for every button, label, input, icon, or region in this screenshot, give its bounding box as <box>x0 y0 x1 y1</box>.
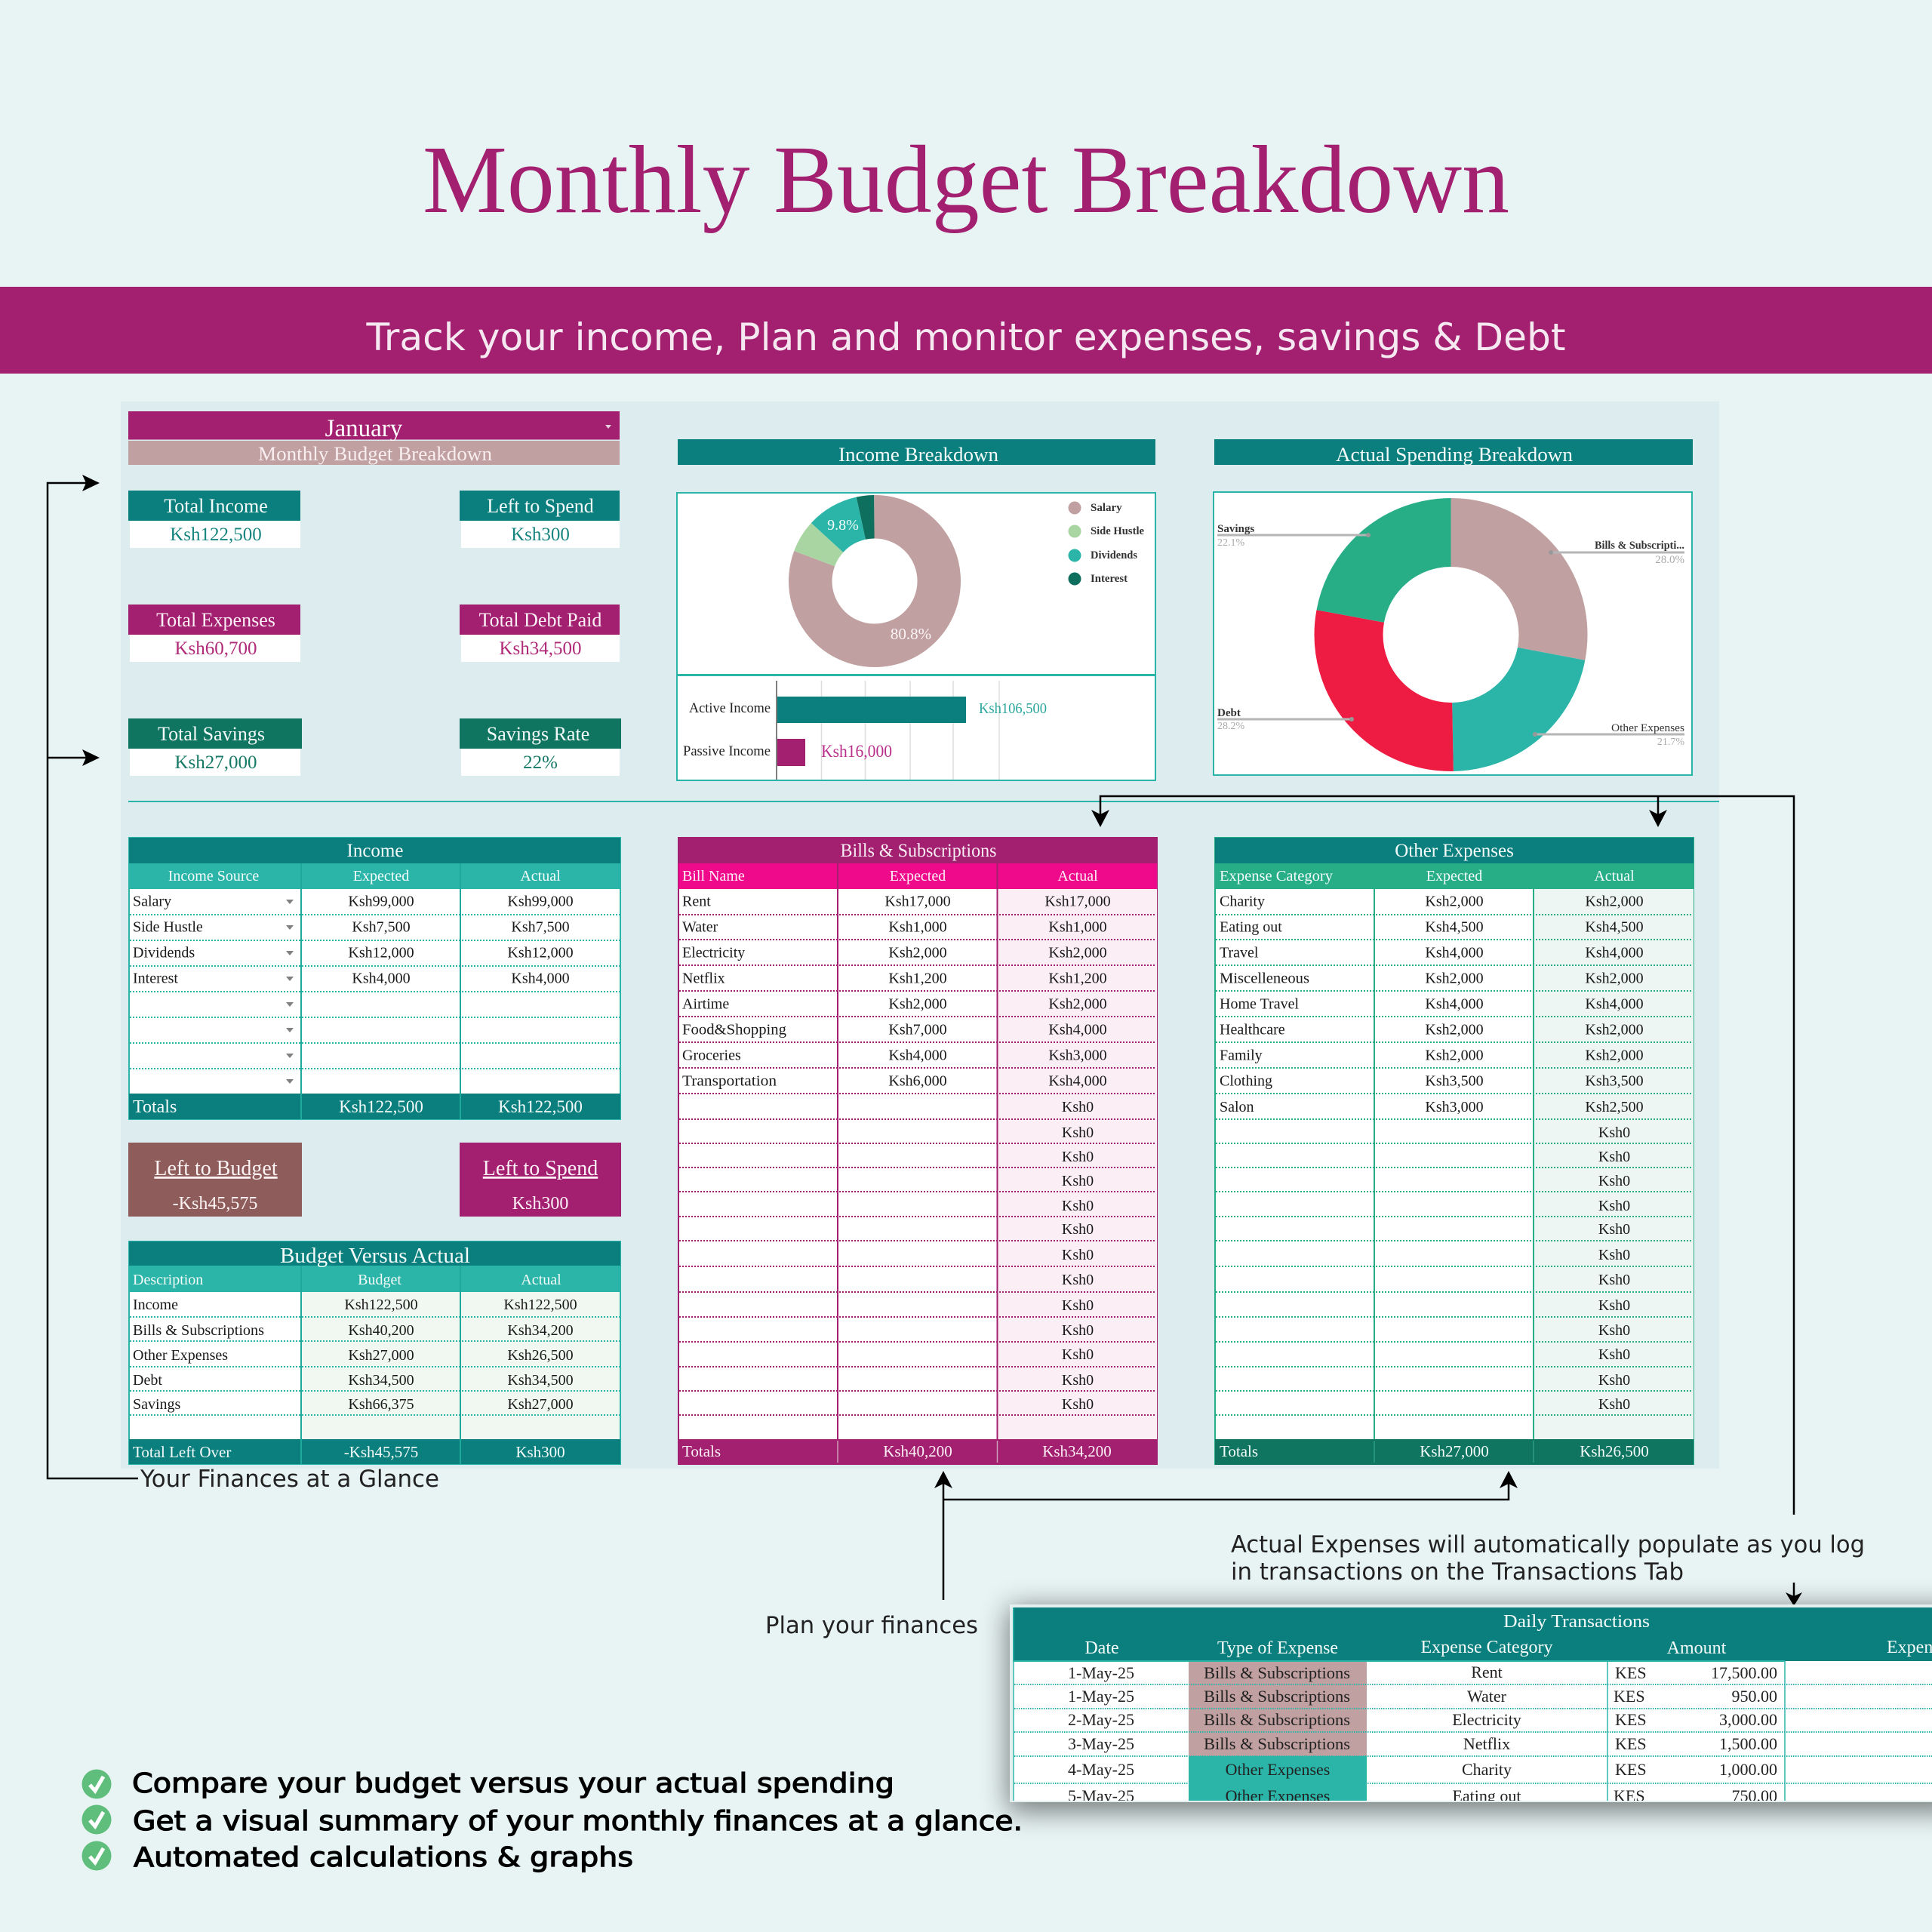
subtitle band: Track your income, Plan and monitor expenses, savings & Debt <box>365 315 1566 359</box>
table: bills and subscriptions: Ksh0 <box>1062 1396 1094 1413</box>
table: income: Ksh7,500 <box>352 919 411 936</box>
table: bills and subscriptions: Ksh1,200 <box>1048 971 1107 987</box>
table: bills and subscriptions: Ksh0 <box>1062 1272 1094 1288</box>
callout: left to spend: Ksh300 <box>512 1194 568 1214</box>
arrow: transactions feed expense tables <box>1091 796 1794 1515</box>
panel: daily transactions table: 1,000.00 <box>1719 1760 1777 1779</box>
legend: income sources: Salary <box>1091 502 1122 514</box>
table: bills and subscriptions: Ksh1,000 <box>888 919 947 936</box>
kpi: left to spend <box>460 491 620 548</box>
panel: daily transactions table: 17,500.00 <box>1711 1663 1777 1682</box>
chart: active vs passive income bars: Ksh106,500 <box>979 700 1047 717</box>
table: other expenses: Ksh2,000 <box>1585 894 1644 910</box>
callout: left to budget: -Ksh45,575 <box>173 1194 257 1214</box>
table: bills and subscriptions: Bill Name <box>682 868 745 884</box>
panel: daily transactions table: KES <box>1615 1760 1647 1779</box>
table: other expenses: Ksh4,000 <box>1585 996 1644 1013</box>
table: other expenses: Ksh0 <box>1598 1221 1630 1238</box>
table: bills and subscriptions <box>678 838 1157 1465</box>
panel: daily transactions table: KES <box>1615 1710 1647 1729</box>
table: other expenses: Ksh4,500 <box>1585 919 1644 936</box>
table: income: Ksh122,500 <box>339 1097 423 1116</box>
table: other expenses: Ksh2,000 <box>1425 1048 1484 1064</box>
table: income: Ksh12,000 <box>348 945 414 961</box>
table: other expenses: Expense Category <box>1220 868 1333 884</box>
table: budget versus actual: Ksh122,500 <box>344 1297 418 1313</box>
table: bills and subscriptions: Ksh4,000 <box>1048 1073 1107 1090</box>
table: bills and subscriptions: Ksh1,000 <box>1048 919 1107 936</box>
table: budget versus actual: Ksh300 <box>515 1443 565 1461</box>
annotation: actual expenses auto populate <box>1231 1531 1865 1586</box>
panel: daily transactions table: 1-May-25 <box>1068 1687 1134 1706</box>
table: other expenses: Ksh3,000 <box>1425 1099 1484 1115</box>
month selector: January <box>325 415 403 442</box>
table: budget versus actual: Income <box>133 1297 178 1313</box>
table: bills and subscriptions: Ksh0 <box>1062 1149 1094 1165</box>
table: bills and subscriptions: Ksh0 <box>1062 1247 1094 1263</box>
callout: other expenses: Other Expenses <box>1611 722 1684 734</box>
panel: daily transactions table: Electricity <box>1452 1710 1521 1729</box>
callout: bills: Bills & Subscripti... <box>1595 540 1684 552</box>
table: budget versus actual: Ksh122,500 <box>503 1297 577 1313</box>
table: bills and subscriptions: Ksh17,000 <box>884 894 951 910</box>
table: income: Ksh122,500 <box>498 1097 583 1116</box>
table: other expenses: Ksh0 <box>1598 1396 1630 1413</box>
table: other expenses: Salon <box>1220 1099 1254 1115</box>
arrow: into daily transactions <box>1786 1583 1802 1606</box>
callout: savings: 22.1% <box>1217 537 1245 549</box>
panel: daily transactions table <box>1008 1604 1932 1811</box>
table: other expenses: Ksh4,000 <box>1585 945 1644 961</box>
table: budget versus actual: Other Expenses <box>133 1347 228 1364</box>
table: budget versus actual: Actual <box>521 1272 561 1288</box>
title: Monthly Budget Breakdown <box>423 126 1509 233</box>
table: other expenses: Actual <box>1594 868 1635 884</box>
annotation: plan your finances: Plan your finances <box>765 1612 978 1639</box>
table: other expenses: Ksh0 <box>1598 1297 1630 1314</box>
kpi: total debt paid: Total Debt Paid <box>479 609 601 631</box>
table: income: Side Hustle <box>133 919 203 936</box>
panel: daily transactions table: Daily Transactions <box>1503 1612 1650 1632</box>
panel: daily transactions table: Water <box>1467 1687 1507 1706</box>
annotation: actual expenses auto populate: in transactions on the Transactions Tab <box>1231 1558 1684 1586</box>
table: other expenses: Ksh0 <box>1598 1149 1630 1165</box>
table: other expenses: Eating out <box>1220 919 1282 936</box>
table: income: Ksh12,000 <box>507 945 574 961</box>
callout: left to budget <box>128 1143 302 1217</box>
table: bills and subscriptions: Ksh2,000 <box>1048 996 1107 1013</box>
table: budget versus actual <box>129 1241 620 1464</box>
table: bills and subscriptions: Ksh3,000 <box>1048 1048 1107 1064</box>
table: other expenses: Ksh4,500 <box>1425 919 1484 936</box>
legend: income sources: Dividends <box>1091 549 1137 561</box>
table: bills and subscriptions: Food&Shopping <box>682 1022 786 1038</box>
table: bills and subscriptions: Totals <box>682 1442 721 1460</box>
table: budget versus actual: Savings <box>133 1396 181 1413</box>
table: bills and subscriptions: Ksh0 <box>1062 1372 1094 1389</box>
panel: daily transactions table: KES <box>1614 1687 1645 1706</box>
table: income: Expected <box>353 868 409 884</box>
table: bills and subscriptions: Ksh0 <box>1062 1322 1094 1339</box>
table: other expenses: Clothing <box>1220 1073 1272 1090</box>
table: budget versus actual: Ksh27,000 <box>348 1347 414 1364</box>
annotation: actual expenses auto populate: Actual Expenses will automatically populate as you log <box>1231 1531 1865 1558</box>
table: other expenses: Ksh27,000 <box>1420 1442 1489 1460</box>
kpi: total debt paid <box>460 605 620 662</box>
table: other expenses: Ksh0 <box>1598 1346 1630 1363</box>
table: bills and subscriptions: Bills & Subscriptions <box>841 841 996 861</box>
chart: income donut: 80.8% <box>891 625 931 643</box>
kpi: total income: Ksh122,500 <box>170 525 262 545</box>
callout: other expenses: 21.7% <box>1657 737 1684 748</box>
table: bills and subscriptions: Ksh4,000 <box>888 1048 947 1064</box>
panel: daily transactions table: Bills & Subscriptions <box>1204 1710 1350 1729</box>
table: budget versus actual: Budget <box>358 1272 401 1288</box>
table: income: Dividends <box>133 945 195 961</box>
table: income: Salary <box>133 894 171 910</box>
legend: income sources: Side Hustle <box>1091 525 1144 537</box>
panel: daily transactions table: Bills & Subscriptions <box>1204 1734 1350 1753</box>
chart: active vs passive income bars <box>677 675 1155 780</box>
panel: daily transactions table: Other Expenses <box>1226 1786 1330 1805</box>
table: bills and subscriptions: Ksh34,200 <box>1042 1442 1112 1460</box>
chart: active vs passive income bars: Passive Income <box>683 743 771 759</box>
table: income: Ksh99,000 <box>507 894 574 910</box>
table: other expenses: Family <box>1220 1048 1263 1064</box>
table: bills and subscriptions: Ksh0 <box>1062 1297 1094 1314</box>
table: budget versus actual: Debt <box>133 1372 162 1389</box>
table: bills and subscriptions: Netflix <box>682 971 725 987</box>
panel: daily transactions table: KES <box>1615 1663 1647 1682</box>
panel: daily transactions table: Expense Category <box>1420 1638 1553 1657</box>
callout: debt <box>1217 707 1354 732</box>
kpi: total expenses: Total Expenses <box>156 609 275 631</box>
table: other expenses: Ksh4,000 <box>1425 996 1484 1013</box>
table: other expenses: Other Expenses <box>1395 841 1514 861</box>
table: budget versus actual: Ksh34,500 <box>348 1372 414 1389</box>
panel: daily transactions table: Amount <box>1667 1638 1727 1658</box>
table: bills and subscriptions: Groceries <box>682 1048 741 1064</box>
table: bills and subscriptions: Actual <box>1057 868 1098 884</box>
heading: actual spending breakdown <box>1214 439 1693 466</box>
callout: bills <box>1549 540 1684 566</box>
sheet subtitle <box>128 441 620 465</box>
table: income: Totals <box>133 1097 177 1117</box>
kpi: savings rate: 22% <box>523 752 558 773</box>
panel: daily transactions table: 950.00 <box>1731 1687 1777 1706</box>
panel: daily transactions table: 5-May-25 <box>1068 1786 1134 1805</box>
panel: daily transactions table: 2-May-25 <box>1068 1710 1134 1729</box>
table: bills and subscriptions: Ksh0 <box>1062 1221 1094 1238</box>
kpi: total debt paid: Ksh34,500 <box>499 638 582 659</box>
table: bills and subscriptions: Ksh6,000 <box>888 1073 947 1090</box>
table: bills and subscriptions: Ksh0 <box>1062 1124 1094 1141</box>
table: budget versus actual: Budget Versus Actual <box>280 1244 470 1268</box>
table: bills and subscriptions: Ksh4,000 <box>1048 1022 1107 1038</box>
table: bills and subscriptions: Ksh2,000 <box>1048 945 1107 961</box>
table: bills and subscriptions: Expected <box>890 868 946 884</box>
callout: other expenses <box>1533 722 1684 748</box>
panel: daily transactions table: Type of Expense <box>1217 1638 1338 1658</box>
panel: daily transactions table: KES <box>1614 1786 1645 1805</box>
heading: income breakdown <box>678 439 1155 466</box>
bullet: compare budget: Compare your budget versus your actual spending <box>132 1768 894 1799</box>
chart: active vs passive income bars: Active Income <box>689 700 771 716</box>
annotation: your finances at a glance: Your Finances at a Glance <box>140 1466 439 1493</box>
table: budget versus actual: Description <box>133 1272 203 1288</box>
panel: daily transactions table: 3,000.00 <box>1719 1710 1777 1729</box>
table: bills and subscriptions: Ksh0 <box>1062 1099 1094 1115</box>
callout: left to spend: Left to Spend <box>483 1157 598 1180</box>
panel: daily transactions table: Date <box>1084 1638 1119 1658</box>
table: bills and subscriptions: Ksh1,200 <box>888 971 947 987</box>
table: income: Income <box>347 841 403 861</box>
table: other expenses: Totals <box>1220 1442 1258 1460</box>
month selector <box>128 411 620 442</box>
heading: income breakdown: Income Breakdown <box>838 444 998 466</box>
callout: savings <box>1217 523 1371 549</box>
sheet subtitle: Monthly Budget Breakdown <box>258 443 492 465</box>
table: budget versus actual: Ksh34,200 <box>507 1322 574 1339</box>
panel: daily transactions table: 3-May-25 <box>1068 1734 1134 1753</box>
table: bills and subscriptions: Ksh17,000 <box>1044 894 1111 910</box>
bullet: visual summary: Get a visual summary of your monthly finances at a glance. <box>133 1806 1023 1837</box>
table: other expenses: Ksh0 <box>1598 1173 1630 1189</box>
kpi: total expenses: Ksh60,700 <box>174 638 257 659</box>
chart: income donut <box>677 493 1155 675</box>
table: budget versus actual: Ksh34,500 <box>507 1372 574 1389</box>
table: bills and subscriptions: Ksh7,000 <box>888 1022 947 1038</box>
table: bills and subscriptions: Rent <box>682 894 711 910</box>
table: income: Income Source <box>168 868 259 884</box>
kpi: total expenses <box>128 605 300 662</box>
table: bills and subscriptions: Ksh0 <box>1062 1198 1094 1214</box>
kpi: total savings: Total Savings <box>158 723 265 745</box>
table: income: Ksh99,000 <box>348 894 414 910</box>
arrow: finances at a glance bracket <box>48 475 138 1478</box>
table: other expenses: Ksh2,000 <box>1585 1022 1644 1038</box>
table: other expenses: Miscelleneous <box>1220 971 1309 987</box>
kpi: left to spend: Left to Spend <box>487 495 594 517</box>
table: bills and subscriptions: Airtime <box>682 996 729 1013</box>
table: other expenses: Ksh4,000 <box>1425 945 1484 961</box>
table: budget versus actual: Ksh66,375 <box>348 1396 414 1413</box>
callout: left to spend <box>460 1143 621 1217</box>
table: income <box>129 838 620 1119</box>
callout: debt: 28.2% <box>1217 721 1245 732</box>
panel: dashboard background <box>121 401 1719 1469</box>
table: other expenses: Ksh2,000 <box>1425 894 1484 910</box>
kpi: savings rate <box>460 718 621 776</box>
table: income: Actual <box>520 868 561 884</box>
table: other expenses <box>1215 838 1694 1465</box>
table: other expenses: Ksh3,500 <box>1425 1073 1484 1090</box>
table: other expenses: Ksh0 <box>1598 1124 1630 1141</box>
panel: daily transactions table: Charity <box>1462 1760 1512 1779</box>
table: other expenses: Ksh0 <box>1598 1247 1630 1263</box>
callout: debt: Debt <box>1217 707 1241 719</box>
table: budget versus actual: Ksh40,200 <box>348 1322 414 1339</box>
table: other expenses: Ksh2,000 <box>1585 971 1644 987</box>
table: budget versus actual: Ksh27,000 <box>507 1396 574 1413</box>
panel: daily transactions table: Other Expenses <box>1226 1760 1330 1779</box>
table: other expenses: Home Travel <box>1220 996 1299 1013</box>
table: other expenses: Ksh26,500 <box>1580 1442 1649 1460</box>
panel: daily transactions table: Bills & Subscriptions <box>1204 1687 1350 1706</box>
table: other expenses: Ksh2,000 <box>1425 971 1484 987</box>
chart: active vs passive income bars: Ksh16,000 <box>821 742 892 761</box>
table: bills and subscriptions: Transportation <box>682 1073 777 1090</box>
table: other expenses: Ksh3,500 <box>1585 1073 1644 1090</box>
table: bills and subscriptions: Ksh2,000 <box>888 945 947 961</box>
table: budget versus actual: Ksh26,500 <box>507 1347 574 1364</box>
chart: income donut: 9.8% <box>827 517 859 534</box>
table: other expenses: Ksh0 <box>1598 1198 1630 1214</box>
panel: daily transactions table: Bills & Subscriptions <box>1204 1663 1350 1682</box>
table: other expenses: Ksh2,000 <box>1425 1022 1484 1038</box>
table: bills and subscriptions: Ksh2,000 <box>888 996 947 1013</box>
chart: actual spending donut <box>1214 492 1692 775</box>
panel: daily transactions table: 4-May-25 <box>1068 1760 1134 1779</box>
legend: income sources <box>1069 501 1144 586</box>
table: other expenses: Ksh2,500 <box>1585 1099 1644 1115</box>
kpi: total savings <box>128 718 302 776</box>
table: bills and subscriptions: Water <box>682 919 718 936</box>
panel: daily transactions table: Rent <box>1471 1663 1503 1681</box>
kpi: savings rate: Savings Rate <box>487 723 589 745</box>
panel: daily transactions table: KES <box>1615 1734 1647 1753</box>
legend: income sources: Interest <box>1091 573 1128 585</box>
subtitle band <box>0 287 1932 374</box>
table: bills and subscriptions: Ksh40,200 <box>883 1442 952 1460</box>
table: other expenses: Ksh0 <box>1598 1372 1630 1389</box>
table: other expenses: Charity <box>1220 894 1265 910</box>
bullet: automated calculations: Automated calculations & graphs <box>134 1842 633 1873</box>
callout: bills: 28.0% <box>1655 554 1684 566</box>
panel: daily transactions table: Eating out <box>1452 1786 1521 1805</box>
kpi: total income: Total Income <box>164 495 268 517</box>
kpi: left to spend: Ksh300 <box>511 525 570 545</box>
panel: daily transactions table: Netflix <box>1463 1734 1510 1753</box>
table: other expenses: Healthcare <box>1220 1022 1285 1038</box>
table: other expenses: Expected <box>1426 868 1482 884</box>
table: income: Ksh7,500 <box>511 919 570 936</box>
table: budget versus actual: Bills & Subscriptions <box>133 1322 264 1339</box>
panel: daily transactions table: 750.00 <box>1731 1786 1777 1805</box>
table: bills and subscriptions: Ksh0 <box>1062 1173 1094 1189</box>
table: income: Ksh4,000 <box>352 971 411 987</box>
panel: daily transactions table: 1-May-25 <box>1068 1663 1134 1682</box>
arrow: plan your finances into budget tables <box>934 1471 1518 1600</box>
table: other expenses: Ksh0 <box>1598 1322 1630 1339</box>
kpi: total savings: Ksh27,000 <box>174 752 257 773</box>
table: income: Ksh4,000 <box>511 971 570 987</box>
table: budget versus actual: Total Left Over <box>133 1443 231 1461</box>
table: income: Interest <box>133 971 178 987</box>
callout: left to budget: Left to Budget <box>154 1157 278 1180</box>
table: budget versus actual: -Ksh45,575 <box>344 1443 418 1461</box>
table: bills and subscriptions: Ksh0 <box>1062 1346 1094 1363</box>
table: other expenses: Ksh0 <box>1598 1272 1630 1288</box>
kpi: total income <box>128 491 300 548</box>
table: other expenses: Ksh2,000 <box>1585 1048 1644 1064</box>
table: other expenses: Travel <box>1220 945 1259 961</box>
heading: actual spending breakdown: Actual Spending Breakdown <box>1336 444 1573 466</box>
callout: savings: Savings <box>1217 523 1254 535</box>
table: bills and subscriptions: Electricity <box>682 945 745 961</box>
panel: daily transactions table: 1,500.00 <box>1719 1734 1777 1753</box>
